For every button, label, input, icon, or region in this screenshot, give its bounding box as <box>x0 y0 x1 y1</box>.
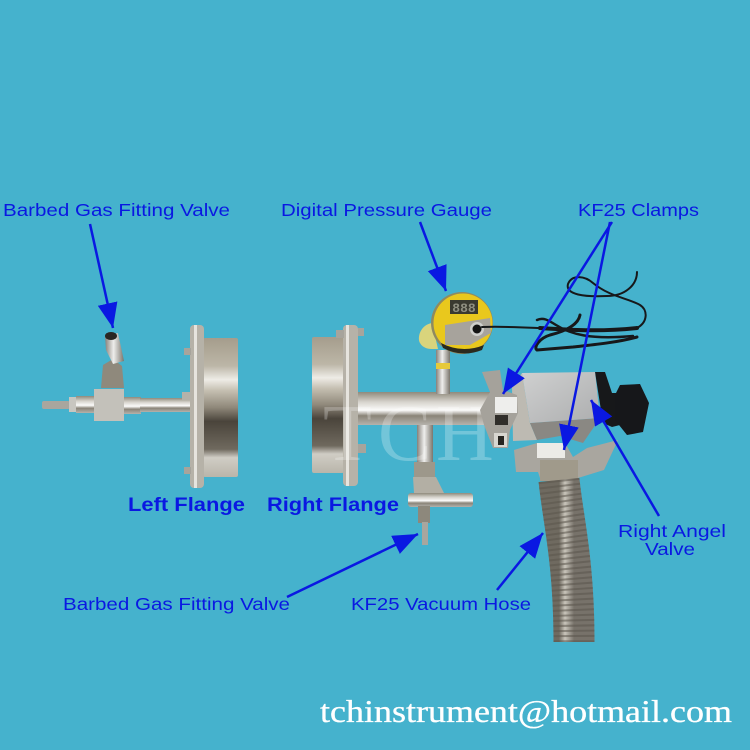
lower fitting <box>408 425 473 545</box>
gauge connector <box>445 318 491 345</box>
KF25 vacuum hose <box>559 480 574 642</box>
arrow: clamp upper <box>503 222 612 394</box>
label: barbed gas fitting valve bottom: Barbed Gas Fitting Valve <box>63 594 290 614</box>
watermark: C <box>378 390 431 478</box>
arrow: barbed valve lower <box>287 534 418 597</box>
main tube <box>355 392 495 425</box>
valve body <box>522 372 600 423</box>
arrow: barbed valve left <box>90 224 113 328</box>
digital pressure gauge <box>419 292 493 354</box>
arrow: right angle valve <box>591 400 659 516</box>
label: right angle valve <box>618 521 726 559</box>
label: right flange: Right Flange <box>267 495 399 516</box>
watermark <box>323 390 494 478</box>
upper clamp <box>480 370 518 448</box>
gauge stem <box>436 350 450 394</box>
arrows <box>90 222 659 597</box>
left pipe <box>140 398 191 412</box>
right flange body <box>312 337 344 473</box>
watermark: H <box>436 390 494 478</box>
gauge display <box>450 300 478 314</box>
left flange body <box>203 338 238 477</box>
right angle valve <box>480 370 649 481</box>
right flange assembly <box>312 325 495 545</box>
label: barbed gas fitting valve top: Barbed Gas Fitting Valve <box>3 200 230 220</box>
cable <box>482 272 646 350</box>
valve side body <box>512 373 537 441</box>
label: right angle valve: Right Angel <box>618 521 726 541</box>
left flange assembly <box>42 325 238 488</box>
contact email: tchinstrument@hotmail.com <box>320 693 732 729</box>
label: left flange: Left Flange <box>128 495 245 516</box>
arrow: clamp lower <box>564 222 610 450</box>
label: KF25 vacuum hose: KF25 Vacuum Hose <box>351 594 531 614</box>
lower clamp <box>514 440 618 478</box>
digital pressure gauge: 888 <box>452 301 476 316</box>
arrow: pressure gauge <box>420 222 446 291</box>
valve black bonnet <box>595 372 620 427</box>
valve knob <box>615 384 649 435</box>
arrow: vacuum hose <box>497 533 543 590</box>
left barbed fitting <box>42 332 141 421</box>
label: KF25 clamps: KF25 Clamps <box>578 200 699 220</box>
watermark: T <box>323 390 372 478</box>
label: right angle valve: Valve <box>645 539 695 559</box>
label: digital pressure gauge: Digital Pressure Gauge <box>281 200 492 220</box>
